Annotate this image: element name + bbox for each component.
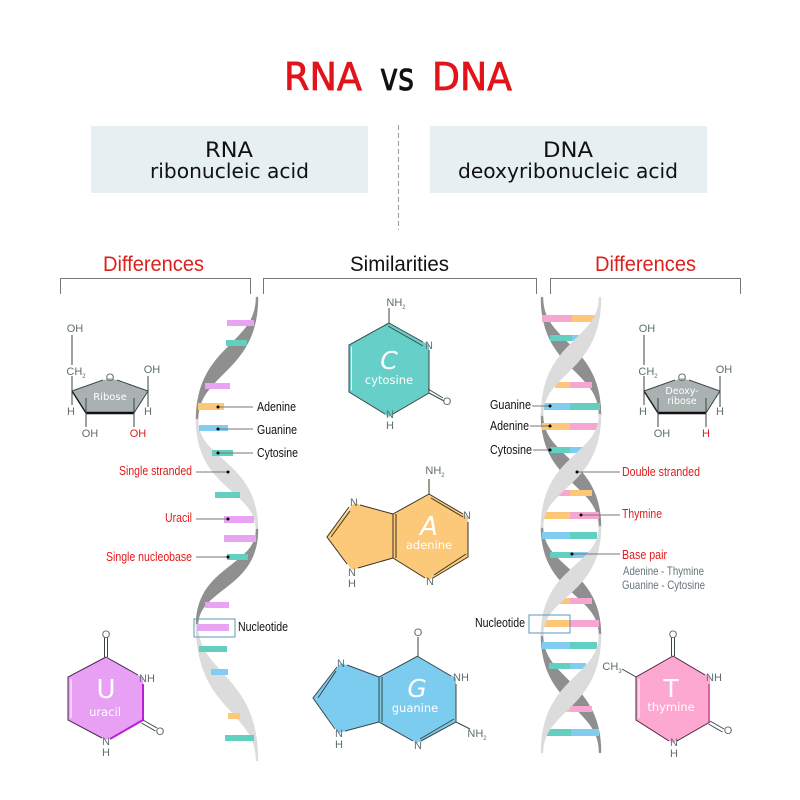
adenine: 2 — [441, 473, 445, 479]
DNA callouts: Nucleotide — [475, 615, 525, 630]
DNA callouts: Thymine — [622, 506, 662, 521]
guanine — [313, 627, 487, 752]
adenine: A — [418, 512, 438, 542]
deoxyribose sugar: ribose — [667, 396, 697, 407]
DNA callouts: Guanine - Cytosine — [622, 578, 705, 592]
DNA base pairs — [542, 315, 600, 736]
uracil: O — [102, 629, 111, 641]
DNA callouts — [475, 397, 705, 633]
RNA callouts: Guanine — [257, 422, 297, 437]
ribose sugar: 2 — [82, 374, 86, 380]
cytosine: O — [443, 396, 452, 408]
guanine: G — [407, 674, 427, 703]
deoxyribose sugar: H — [639, 406, 647, 418]
thymine: O — [669, 629, 678, 641]
DNA double helix — [542, 298, 600, 752]
guanine: 2 — [483, 736, 487, 742]
DNA callouts: Guanine — [490, 397, 531, 412]
RNA callouts: Adenine — [257, 399, 296, 414]
DNA callouts: Cytosine — [490, 442, 532, 457]
uracil: H — [102, 747, 110, 759]
uracil: uracil — [89, 705, 121, 719]
adenine — [327, 465, 471, 590]
ribose sugar — [66, 323, 160, 440]
adenine: N — [350, 497, 358, 509]
thymine: NH — [706, 672, 722, 684]
adenine: N — [348, 567, 356, 579]
ribose sugar: OH — [144, 364, 160, 376]
DNA callouts: Adenine — [490, 418, 529, 433]
title: RNA — [284, 55, 362, 99]
deoxyribose sugar: H — [702, 428, 710, 440]
cytosine: NH — [386, 297, 402, 309]
RNA callouts: Uracil — [165, 510, 192, 525]
panel: DNA heading: DNA — [543, 138, 594, 162]
panel: DNA heading — [430, 126, 707, 193]
deoxyribose sugar: OH — [654, 428, 670, 440]
panel: RNA heading: ribonucleic acid — [150, 159, 309, 183]
thymine: T — [662, 674, 679, 703]
panel: RNA heading: RNA — [205, 138, 254, 162]
uracil: N — [102, 736, 110, 748]
deoxyribose sugar: 2 — [654, 374, 658, 380]
heading: similarities: Similarities — [350, 253, 449, 276]
heading: RNA differences: Differences — [103, 253, 204, 276]
panel: DNA heading: deoxyribonucleic acid — [458, 159, 678, 183]
thymine: N — [670, 737, 678, 749]
uracil: NH — [139, 673, 155, 685]
thymine: thymine — [647, 700, 695, 714]
deoxyribose sugar: OH — [716, 364, 732, 376]
ribose sugar: H — [144, 406, 152, 418]
cytosine: N — [386, 409, 394, 421]
guanine: N — [337, 658, 345, 670]
DNA callouts: Adenine - Thymine — [623, 564, 704, 578]
thymine — [602, 629, 733, 760]
thymine: H — [670, 748, 678, 760]
thymine: 3 — [618, 669, 622, 675]
deoxyribose sugar — [638, 323, 732, 440]
thymine: O — [724, 725, 733, 737]
adenine: H — [348, 578, 356, 590]
guanine: H — [335, 739, 343, 751]
guanine: O — [414, 627, 423, 639]
deoxyribose sugar: Deoxy- — [665, 386, 699, 397]
deoxyribose sugar: OH — [639, 323, 655, 335]
RNA callouts: Single nucleobase — [106, 549, 192, 564]
deoxyribose sugar: O — [678, 372, 687, 384]
ribose sugar: OH — [82, 428, 98, 440]
guanine: NH — [467, 728, 483, 740]
adenine: N — [463, 510, 471, 522]
RNA single strand helix — [197, 298, 257, 760]
title: DNA — [432, 55, 512, 99]
RNA callouts: Single stranded — [119, 463, 192, 478]
cytosine: H — [386, 420, 394, 432]
guanine: guanine — [392, 701, 438, 715]
RNA callouts — [106, 399, 298, 637]
deoxyribose sugar: H — [716, 406, 724, 418]
guanine: N — [335, 728, 343, 740]
guanine: N — [414, 740, 422, 752]
cytosine: C — [380, 346, 398, 375]
RNA callouts: Nucleotide — [238, 619, 288, 634]
ribose sugar: O — [106, 372, 115, 384]
adenine: N — [426, 576, 434, 588]
heading: DNA differences: Differences — [595, 253, 696, 276]
uracil — [68, 629, 165, 759]
deoxyribose sugar: CH — [638, 366, 654, 378]
uracil: U — [96, 675, 116, 705]
thymine: CH — [602, 661, 618, 673]
adenine: adenine — [406, 538, 452, 552]
panel: RNA heading — [91, 126, 368, 193]
RNA callouts: Cytosine — [257, 445, 298, 460]
ribose sugar: H — [67, 406, 75, 418]
uracil: O — [156, 726, 165, 738]
DNA callouts: Double stranded — [622, 464, 700, 479]
ribose sugar: OH — [67, 323, 83, 335]
cytosine: cytosine — [365, 373, 413, 387]
title: vs — [380, 55, 414, 99]
ribose sugar: Ribose — [93, 392, 127, 403]
guanine: NH — [453, 672, 469, 684]
RNA nucleobases — [197, 320, 256, 741]
cytosine: N — [425, 340, 433, 352]
adenine: NH — [425, 465, 441, 477]
DNA callouts: Base pair — [622, 547, 668, 562]
ribose sugar: OH — [130, 428, 146, 440]
title — [284, 55, 512, 99]
ribose sugar: CH — [66, 366, 82, 378]
cytosine: 2 — [402, 305, 406, 311]
cytosine — [349, 297, 452, 432]
